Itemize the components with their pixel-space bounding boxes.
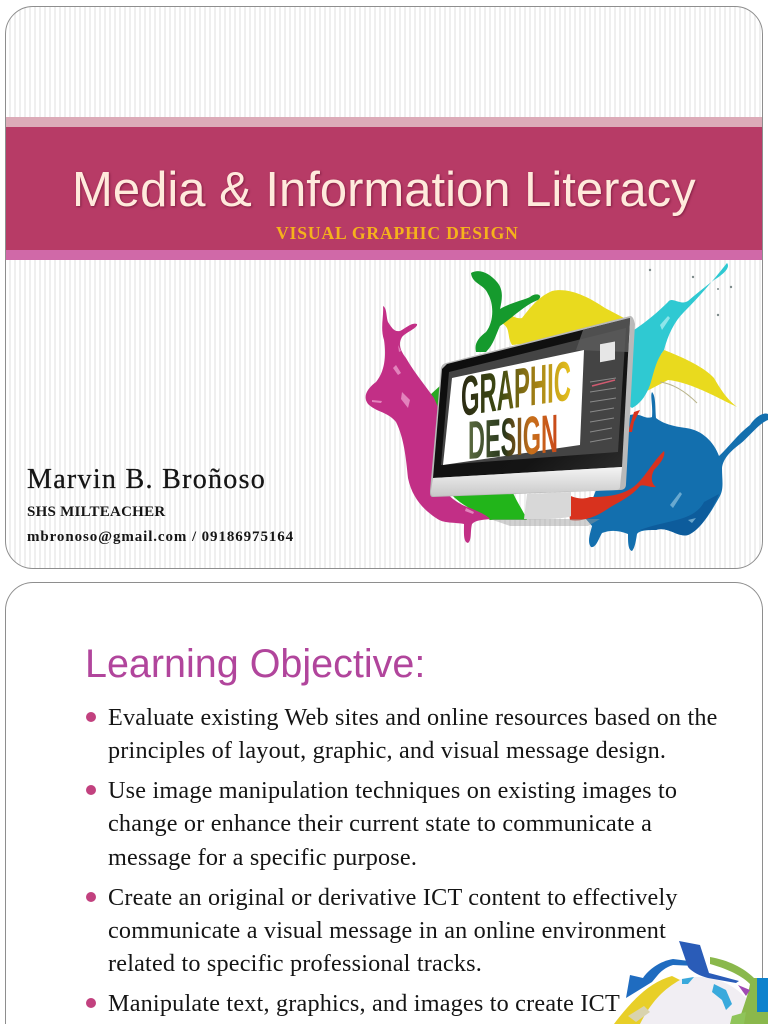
bullet: [86, 712, 96, 722]
text line: message for a specific purpose.: [108, 844, 417, 871]
dark blue shadow in splash: [640, 494, 719, 535]
thin paint wisp: [660, 382, 697, 403]
monitor chin: [431, 467, 622, 496]
illustration: paint splash and monitor: GRAPHIC: [461, 349, 571, 428]
illustration: globe with wrapped tools: [614, 941, 768, 1024]
heading: learning objective: Learning Objective:: [85, 642, 425, 686]
magenta highlights: [372, 345, 474, 514]
text line: Create an original or derivative ICT content to effectively: [108, 884, 678, 911]
text line: communicate a visual message in an online environment: [108, 917, 666, 944]
monitor bezel: [433, 318, 630, 478]
illustration: paint splash and monitor: DESIGN: [468, 404, 558, 471]
red small drip: [628, 410, 640, 432]
bullet: [86, 892, 96, 902]
monitor shadow: [490, 519, 600, 526]
yellow ring: [614, 976, 680, 1024]
monitor stand: [524, 492, 571, 519]
monitor body: [430, 316, 635, 497]
blue arrow: [626, 959, 697, 998]
top glare on bezel: [576, 318, 630, 352]
blue paint splash: [585, 392, 768, 551]
text line: change or enhance their current state to communicate a: [108, 810, 652, 837]
graphic design text: [461, 349, 571, 471]
blue folded paper: [679, 941, 739, 983]
globe: [636, 977, 760, 1024]
text line: principles of layout, graphic, and visual message design.: [108, 737, 666, 764]
red paint splash: [567, 451, 664, 521]
bullet: [86, 785, 96, 795]
author role: SHS MILTEACHER: [27, 504, 165, 520]
yellow paint splash: [500, 290, 737, 407]
slide 1: title slide: [5, 6, 763, 569]
top light pink band: [4, 117, 766, 128]
objective 2: [86, 777, 677, 871]
title: Media & Information Literacy: [72, 163, 696, 217]
illustration: paint splash and monitor: [366, 263, 768, 551]
text line: Evaluate existing Web sites and online resources based on the: [108, 704, 718, 731]
author name: Marvin B. Broñoso: [27, 464, 266, 495]
subtitle: VISUAL GRAPHIC DESIGN: [276, 223, 519, 243]
purple paint on globe: [738, 985, 750, 996]
green band: [710, 957, 768, 1024]
objective 1: [86, 704, 718, 764]
editor screen: [441, 328, 626, 465]
green splash behind monitor left: [430, 384, 442, 420]
green paint on globe: [730, 1012, 746, 1024]
crimson title band: [4, 127, 766, 250]
paint specks: [649, 269, 732, 316]
text line: Manipulate text, graphics, and images to create ICT: [108, 990, 620, 1017]
editor side panel details: [590, 342, 616, 442]
objective 3: [86, 884, 678, 977]
lower pink band: [4, 250, 766, 260]
blue tab: [757, 978, 768, 1012]
author contact: mbronoso@gmail.com / 09186975164: [27, 529, 294, 545]
magenta paint splash: [366, 306, 490, 543]
cyan paint splash: [628, 263, 728, 408]
bullet: [86, 998, 96, 1008]
objective 4: [86, 990, 620, 1017]
text line: related to specific professional tracks.: [108, 950, 482, 977]
green lower splash: [452, 493, 527, 520]
blue splash highlights: [670, 492, 696, 523]
green paint splash: [471, 271, 540, 352]
text line: Use image manipulation techniques on existing images to: [108, 777, 677, 804]
white canvas: [443, 350, 584, 465]
slide 2: learning objective: [5, 582, 763, 1024]
ring label: [628, 1006, 650, 1022]
cyan highlight: [660, 316, 670, 330]
cyan paint on globe: [682, 977, 732, 1010]
